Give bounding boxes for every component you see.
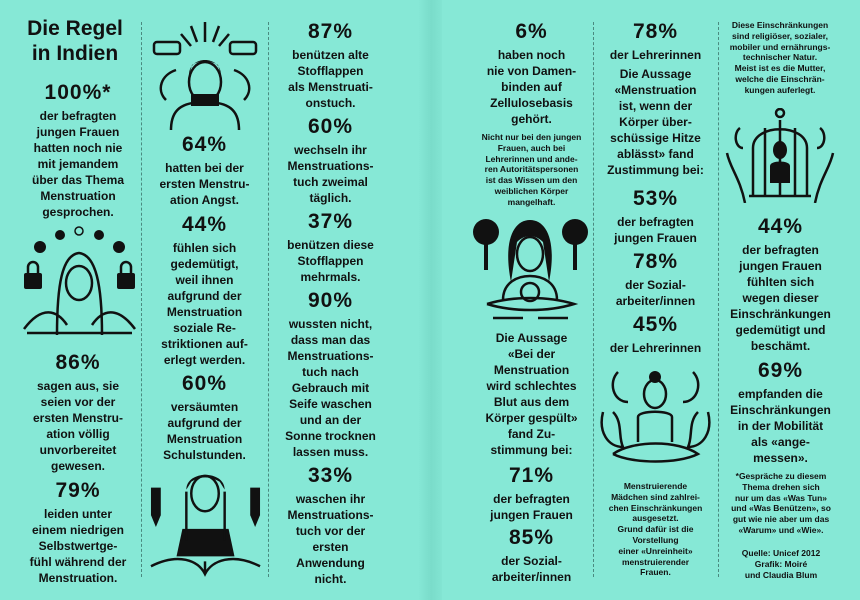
stat: 60% school: versäumten: [171, 400, 238, 414]
stat: 87%: [288, 20, 373, 110]
title: Die Regel: [27, 17, 123, 40]
stat: 60%: [287, 115, 374, 205]
stat: 100%: der befragten: [40, 109, 116, 123]
stat: 44% ashamed: 44%: [758, 215, 803, 238]
statement: bad blood: Körper gespült»: [485, 411, 578, 425]
stat: 6%: binden auf: [501, 80, 562, 94]
stat: 79%: Selbstwertge-: [39, 539, 117, 553]
stat: 60% school: aufgrund der: [168, 416, 242, 430]
note: restrictions: chen Einschränkungen: [609, 503, 702, 513]
stat: 45%: [610, 313, 701, 355]
stat: 87%: Stofflappen: [298, 64, 364, 78]
statement: excess heat: Körper über-: [619, 115, 692, 129]
stat: 86%: 86%: [55, 351, 101, 374]
note: teachers knowledge: mangelhaft.: [508, 197, 555, 207]
stat: 37%: Stofflappen: [298, 254, 364, 268]
stat: 78% social workers: [616, 250, 695, 308]
stat: 44%: weil ihnen: [175, 273, 234, 287]
statement: bad blood: Menstruation: [494, 363, 569, 377]
stat: 44% ashamed: fühlten sich: [747, 275, 814, 289]
stat: 90%: [285, 289, 376, 459]
stat: 44%: gedemütigt,: [170, 257, 238, 271]
stat: 90%: dass man das: [291, 333, 370, 347]
stat: 64%: ersten Menstru-: [159, 177, 250, 191]
note: restrictions: ausgesetzt.: [632, 513, 679, 523]
stat: 44%: [161, 213, 248, 367]
stat: 37%: [287, 210, 374, 284]
statement: bad blood: [485, 331, 578, 457]
stat: 6%: Zellulosebasis: [490, 96, 573, 110]
icon: woman in birdcage: [726, 108, 834, 203]
source: und Claudia Blum: [745, 570, 817, 580]
note: restriction types: welche die Einschrän-: [735, 74, 825, 84]
stat: 100%: jungen Frauen: [37, 125, 119, 139]
stat: 44%: erlegt werden.: [164, 353, 245, 367]
stat: 78% social workers: arbeiter/innen: [616, 294, 695, 308]
stat: 60%: wechseln ihr: [294, 143, 367, 157]
note: restrictions: Mädchen sind zahlrei-: [611, 492, 700, 502]
stat: 78% teachers: der Lehrerinnen: [610, 48, 701, 62]
stat: 100%: Menstruation: [40, 189, 116, 203]
stat: 69%: Einschränkungen: [730, 403, 831, 417]
footnote: und «Was Benützen», so: [731, 503, 831, 513]
statement: excess heat: Die Aussage: [620, 67, 691, 81]
stat: 85%: [492, 526, 571, 584]
footnote: gut wie nie aber um das: [733, 514, 829, 524]
stat: 86%: sagen aus, sie: [37, 379, 119, 393]
stat: 79%: einem niedrigen: [32, 523, 124, 537]
stat: 60%: 60%: [308, 115, 353, 138]
stat: 90%: Seife waschen: [289, 397, 372, 411]
stat: 90%: 90%: [308, 289, 353, 312]
note: teachers knowledge: Nicht nur bei den jungen: [482, 132, 581, 142]
note: restriction types: technischer Natur.: [743, 52, 817, 62]
icon: woman covering mouth: [152, 22, 258, 130]
statement: excess heat: «Menstruation: [614, 83, 696, 97]
stat: 71%: 71%: [509, 464, 554, 487]
stat: 71%: der befragten: [493, 492, 570, 506]
statement: bad blood: stimmung bei:: [490, 443, 572, 457]
stat: 79%: Menstruation.: [39, 571, 117, 585]
stat: 6%: haben noch: [498, 48, 565, 62]
stat: 69%: messen».: [753, 451, 808, 465]
icon: meditating woman with flames: [600, 371, 711, 463]
stat: 60%: tuch zweimal: [293, 175, 368, 189]
note: restrictions: Menstruierende: [624, 481, 687, 491]
note: restrictions: menstruierender: [622, 557, 689, 567]
note: restriction types: mobiler und ernährungs-: [730, 42, 830, 52]
stat: 71%: [490, 464, 573, 522]
note: restriction types: Diese Einschränkungen: [732, 20, 828, 30]
stat: 44% ashamed: [730, 215, 831, 353]
stat: 64%: hatten bei der: [165, 161, 244, 175]
stat: 90%: wussten nicht,: [289, 317, 372, 331]
stat: 37%: 37%: [308, 210, 353, 233]
stat: 33%: waschen ihr: [296, 492, 365, 506]
stat: 100%: [32, 81, 124, 219]
statement: excess heat: schüssige Hitze: [610, 131, 701, 145]
stat: 100%: hatten noch nie: [34, 141, 122, 155]
stat: 60% school: Menstruation: [167, 432, 242, 446]
stat: 44% ashamed: gedemütigt und: [736, 323, 826, 337]
note: restrictions: [609, 481, 702, 577]
stat: 79%: [30, 479, 126, 585]
title: in Indien: [32, 42, 118, 65]
stat: 86%: gewesen.: [51, 459, 105, 473]
footnote: nur um das «Was Tun»: [735, 493, 827, 503]
stat: 44% ashamed: wegen dieser: [742, 291, 819, 305]
note: restrictions: Vorstellung: [632, 535, 679, 545]
stat: 78% social workers: der Sozial-: [625, 278, 686, 292]
stat: 33%: nicht.: [314, 572, 346, 586]
source: Grafik: Moiré: [755, 559, 807, 569]
stat: 33%: Anwendung: [296, 556, 365, 570]
stat: 44%: soziale Re-: [173, 321, 236, 335]
stat: 100%: 100%*: [45, 81, 111, 104]
stat: 33%: [287, 464, 374, 586]
stat: 90%: und an der: [300, 413, 361, 427]
stat: 87%: onstuch.: [306, 96, 356, 110]
footnote: *Gespräche zu diesem: [736, 471, 826, 481]
note: restrictions: Frauen.: [640, 567, 671, 577]
stat: 69%: als «ange-: [751, 435, 810, 449]
stat: 6%: gehört.: [511, 112, 552, 126]
stat: 85%: arbeiter/innen: [492, 570, 571, 584]
note: restriction types: Meist ist es die Mutter,: [735, 63, 825, 73]
stat: 78% teachers: 78%: [633, 20, 678, 43]
statement: bad blood: fand Zu-: [508, 427, 555, 441]
stat: 60% school: Schulstunden.: [163, 448, 246, 462]
icon: girl with book and pencils: [150, 474, 260, 577]
stat: 37%: mehrmals.: [300, 270, 361, 284]
footnote: [731, 471, 831, 535]
stat: 44% ashamed: jungen Frauen: [739, 259, 822, 273]
note: teachers knowledge: Frauen, auch bei: [498, 143, 565, 153]
stat: 100%: mit jemandem: [38, 157, 118, 171]
stat: 90%: lassen muss.: [293, 445, 368, 459]
stat: 44% ashamed: der befragten: [742, 243, 819, 257]
stat: 60%: täglich.: [309, 191, 352, 205]
stat: 85%: 85%: [509, 526, 554, 549]
stat: 44%: striktionen auf-: [161, 337, 248, 351]
source: Quelle: Unicef 2012: [742, 548, 820, 558]
stat: 87%: 87%: [308, 20, 353, 43]
stat: 33%: tuch vor der: [296, 524, 365, 538]
stat: 44% ashamed: Einschränkungen: [730, 307, 831, 321]
stat: 100%: gesprochen.: [42, 205, 114, 219]
statement: bad blood: Die Aussage: [496, 331, 567, 345]
stat: 78% teachers: [610, 20, 701, 62]
stat: 87%: benützen alte: [292, 48, 369, 62]
stat: 6%: 6%: [515, 20, 548, 43]
stat: 79%: 79%: [55, 479, 101, 502]
stat: 79%: fühl während der: [30, 555, 126, 569]
stat: 53%: jungen Frauen: [614, 231, 697, 245]
stat: 86%: [33, 351, 123, 473]
stat: 78% social workers: 78%: [633, 250, 678, 273]
stat: 90%: Gebrauch mit: [292, 381, 369, 395]
statement: excess heat: Zustimmung bei:: [607, 163, 704, 177]
stat: 53%: der befragten: [617, 215, 694, 229]
source: [742, 548, 820, 580]
icon: woman with locks and moons: [23, 226, 136, 335]
stat: 44%: aufgrund der: [168, 289, 242, 303]
stat: 53%: [614, 187, 697, 245]
stat: 90%: tuch nach: [302, 365, 359, 379]
note: restriction types: [730, 20, 830, 95]
statement: bad blood: Blut aus dem: [494, 395, 569, 409]
footnote: Thema drehen sich: [742, 482, 820, 492]
footnote: «Warum» und «Wie».: [738, 525, 824, 535]
stat: 69%: empfanden die: [738, 387, 823, 401]
statement: excess heat: ist, wenn der: [619, 99, 692, 113]
stat: 86%: ersten Menstru-: [33, 411, 123, 425]
stat: 6%: [487, 20, 576, 126]
stat: 60% school: [163, 372, 246, 462]
note: restriction types: kungen auferlegt.: [745, 85, 815, 95]
stat: 69%: in der Mobilität: [738, 419, 823, 433]
note: restriction types: sind religiöser, sozialer,: [732, 31, 828, 41]
stat: 64%: ation Angst.: [170, 193, 239, 207]
stat: 87%: als Menstruati-: [288, 80, 373, 94]
stat: 33%: 33%: [308, 464, 353, 487]
stat: 71%: jungen Frauen: [490, 508, 573, 522]
note: teachers knowledge: ren Autoritätspersonen: [485, 164, 578, 174]
stat: 64%: 64%: [182, 133, 227, 156]
stat: 44%: Menstruation: [167, 305, 242, 319]
stat: 69%: [730, 359, 831, 465]
note: teachers knowledge: [482, 132, 581, 207]
statement: bad blood: «Bei der: [508, 347, 555, 361]
icon: woman with signs and fish: [473, 219, 588, 320]
stat: 86%: unvorbereitet: [40, 443, 116, 457]
stat: 86%: seien vor der: [41, 395, 115, 409]
statement: excess heat: ablässt» fand: [617, 147, 694, 161]
statement: bad blood: wird schlechtes: [486, 379, 577, 393]
stat: 79%: leiden unter: [44, 507, 112, 521]
stat: 37%: benützen diese: [287, 238, 374, 252]
stat: 33%: Menstruations-: [287, 508, 374, 522]
stat: 90%: Menstruations-: [287, 349, 374, 363]
stat: 86%: ation völlig: [46, 427, 110, 441]
stat: 60% school: 60%: [182, 372, 227, 395]
statement: excess heat: [607, 67, 704, 177]
title: [27, 17, 123, 65]
note: restrictions: einer «Unreinheit»: [618, 546, 693, 556]
stat: 44%: 44%: [182, 213, 227, 236]
stat: 100%: über das Thema: [32, 173, 124, 187]
stat: 53%: 53%: [633, 187, 678, 210]
stat: 33%: ersten: [312, 540, 349, 554]
note: restrictions: Grund dafür ist die: [617, 524, 694, 534]
stat: 45%: der Lehrerinnen: [610, 341, 701, 355]
stat: 44%: fühlen sich: [173, 241, 236, 255]
stat: 44% ashamed: beschämt.: [751, 339, 810, 353]
stat: 85%: der Sozial-: [501, 554, 562, 568]
stat: 64%: [159, 133, 250, 207]
stat: 45%: 45%: [633, 313, 678, 336]
stat: 90%: Sonne trocknen: [285, 429, 376, 443]
stat: 6%: nie von Damen-: [487, 64, 576, 78]
stat: 69%: 69%: [758, 359, 803, 382]
note: teachers knowledge: ist das Wissen um den: [486, 175, 577, 185]
stat: 60%: Menstruations-: [287, 159, 374, 173]
note: teachers knowledge: Lehrerinnen und ande-: [485, 154, 578, 164]
note: teachers knowledge: weiblichen Körper: [495, 186, 568, 196]
